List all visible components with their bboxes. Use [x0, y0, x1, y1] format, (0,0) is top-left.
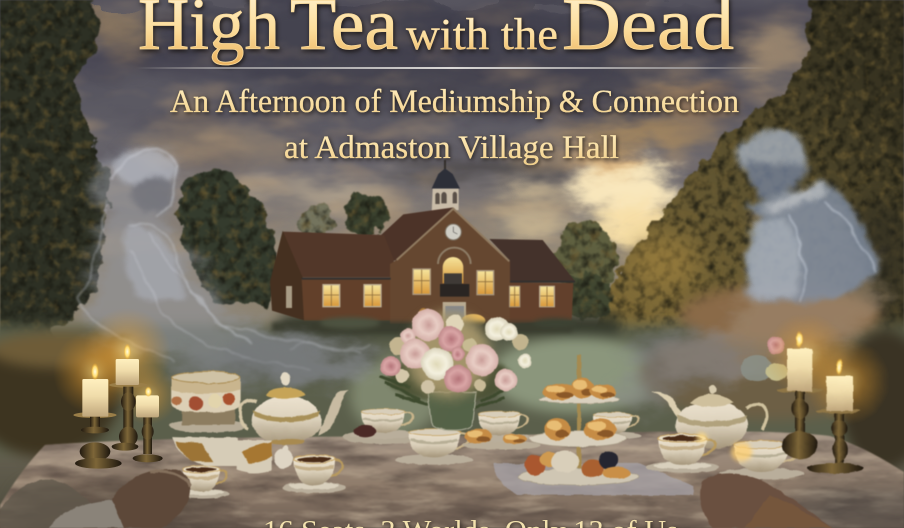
foliage — [380, 354, 515, 408]
title divider — [136, 67, 766, 69]
subtitle — [170, 84, 739, 166]
candles — [82, 359, 159, 417]
flames — [91, 344, 152, 397]
title — [138, 0, 734, 66]
garden hedge below the hall — [272, 317, 577, 332]
front door — [419, 302, 485, 327]
table shadows — [20, 479, 904, 528]
left candle glow — [53, 308, 178, 425]
cake tin on plate — [169, 371, 248, 433]
front teacup with saucer — [282, 455, 346, 493]
cupola with bell tower — [432, 160, 460, 213]
rear teacup — [343, 409, 424, 444]
teapot — [240, 373, 349, 445]
brick walls — [302, 209, 575, 324]
rear cup behind stand — [583, 412, 642, 440]
right tree mass — [553, 0, 904, 350]
right candle stands — [777, 387, 863, 474]
left ghost figure — [80, 148, 370, 382]
glass vase — [428, 392, 476, 430]
clock — [445, 224, 461, 240]
right teapot — [652, 384, 767, 449]
roses — [381, 309, 532, 397]
subtitle: An Afternoon of Mediumship & Connection — [170, 84, 739, 120]
tablecloth — [0, 431, 904, 528]
right candle glow — [765, 313, 890, 425]
lit windows — [286, 248, 555, 308]
flowers behind right candles — [741, 337, 787, 382]
centre teacup — [395, 429, 473, 465]
floral bouquet — [380, 309, 532, 430]
meadow and hedges — [0, 285, 904, 470]
subtitle: at Admaston Village Hall — [284, 130, 619, 166]
candle stands — [73, 382, 163, 469]
cup and pastry plate — [462, 411, 541, 450]
three tier cake stand — [493, 355, 693, 495]
left tea service — [169, 371, 473, 499]
right cups — [646, 432, 803, 479]
drifting spirit smoke — [165, 330, 750, 413]
right ghost figure — [650, 131, 880, 376]
cake stand and right tea service — [462, 313, 890, 495]
sugar bowl and broken cups — [172, 437, 293, 473]
left tree mass — [0, 0, 389, 345]
title: with the — [406, 10, 558, 59]
right candles — [787, 331, 853, 411]
main roofs — [270, 207, 576, 321]
left seated guest hand — [0, 469, 191, 528]
left candelabra with candles — [73, 344, 163, 469]
right seated guest hand — [700, 473, 832, 528]
village hall — [270, 160, 576, 327]
cup in front of left hand — [174, 466, 230, 499]
